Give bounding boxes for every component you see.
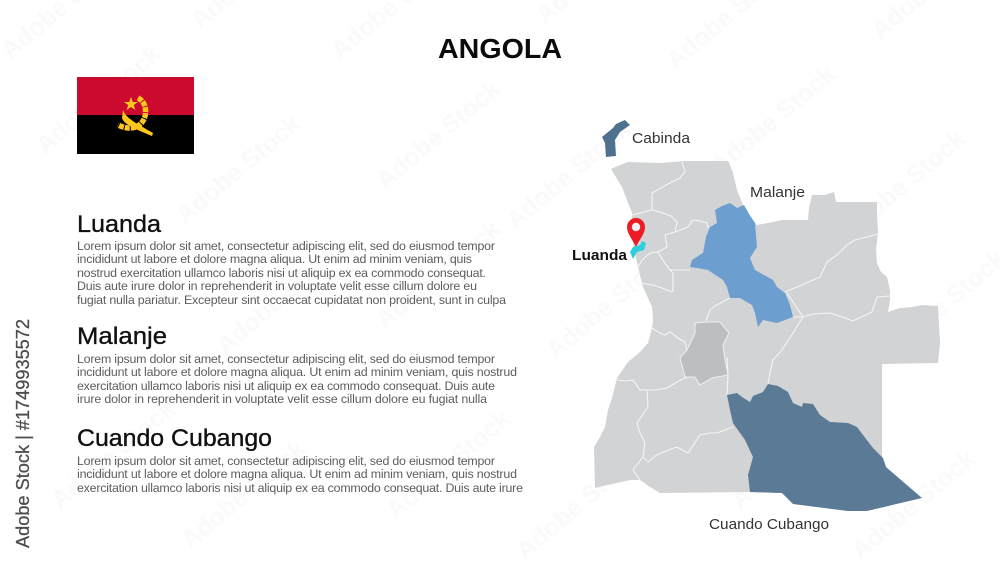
icon: location pin [627,218,645,247]
watermark pattern: Adobe Stock [371,75,506,195]
watermark pattern: Adobe Stock [371,215,506,335]
body text: Luanda: fugiat nulla pariatur. Excepteur sint occaecat cupidatat non proident, sunt in culpa [77,293,506,307]
region: Luanda [630,241,646,259]
flag emblem: machete [122,110,153,136]
heading: Cuando Cubango: Cuando Cubango [77,425,272,452]
watermark pattern: Adobe Stock [541,245,676,365]
label: Malanje: Malanje [750,184,805,201]
text block: Cuando Cubango [77,425,523,495]
flag of Angola [77,77,194,154]
body text: Luanda [77,239,506,307]
body text: Malanje [77,352,517,406]
body text: Luanda: nostrud exercitation ullamco laboris nisi ut aliquip ex ea commodo consequat. [77,266,486,280]
body text: Cuando Cubango [77,454,523,495]
body text: Cuando Cubango: incididunt ut labore et dolore magna aliqua. Ut enim ad minim veniam, quis nostrud [77,467,517,481]
watermark pattern: Adobe Stock [171,110,306,230]
watermark pattern: Adobe Stock [846,445,981,563]
flag emblem: star [124,97,138,110]
text block: Malanje [77,323,517,406]
watermark pattern: Adobe Stock [211,240,346,360]
body text: Malanje: irure dolor in reprehenderit in voluptate velit esse cillum dolore eu fugiat nulla [77,392,487,406]
watermark pattern: Adobe Stock [726,395,861,515]
region: Cabinda [602,120,630,157]
label: Cuando Cubango: Cuando Cubango [709,516,829,533]
body text: Cuando Cubango: exercitation ullamco laboris nisi ut aliquip ex ea commodo consequat. Duis aute irure [77,481,523,495]
watermark pattern: Adobe Stock [31,40,166,160]
heading: Luanda: Luanda [77,211,162,238]
body text: Cuando Cubango: Lorem ipsum dolor sit amet, consectetur adipiscing elit, sed do eiusmod tempor [77,454,495,468]
body text: Malanje: incididunt ut labore et dolore magna aliqua. Ut enim ad minim veniam, quis nostrud [77,365,517,379]
heading: Malanje: Malanje [77,323,167,350]
watermark pattern: Adobe Stock [836,125,971,245]
body text: Malanje: Lorem ipsum dolor sit amet, consectetur adipiscing elit, sed do eiusmod tempor [77,352,495,366]
body text: Malanje: exercitation ullamco laboris nisi ut aliquip ex ea commodo consequat. Duis aute [77,379,495,393]
watermark pattern: Adobe Stock [46,395,181,515]
watermark pattern: Adobe Stock [706,60,841,180]
text block: Luanda [77,211,506,307]
watermark pattern: Adobe Stock [501,115,636,235]
region: Malanje [690,203,793,327]
body text: Luanda: incididunt ut labore et dolore magna aliqua. Ut enim ad minim veniam, quis [77,252,472,266]
watermark pattern: Adobe Stock [511,445,646,563]
map of Angola [594,120,940,511]
label: Luanda: Luanda [572,247,628,264]
province borders [617,162,890,480]
body text: Luanda: Lorem ipsum dolor sit amet, consectetur adipiscing elit, sed do eiusmod tempor [77,239,495,253]
watermark pattern: Adobe Stock [381,405,516,525]
region: central highlighted province [680,322,729,385]
label: Cabinda: Cabinda [632,130,691,147]
watermark pattern: Adobe Stock [176,435,311,555]
flag emblem: gear arc [118,98,146,128]
title: ANGOLA [438,33,562,64]
region: Cuando Cubango [727,384,922,511]
body text: Luanda: Duis aute irure dolor in reprehenderit in voluptate velit esse cillum dolore eu [77,279,477,293]
stock caption: Adobe Stock | #1749935572 [13,319,33,548]
mainland base [594,161,940,511]
